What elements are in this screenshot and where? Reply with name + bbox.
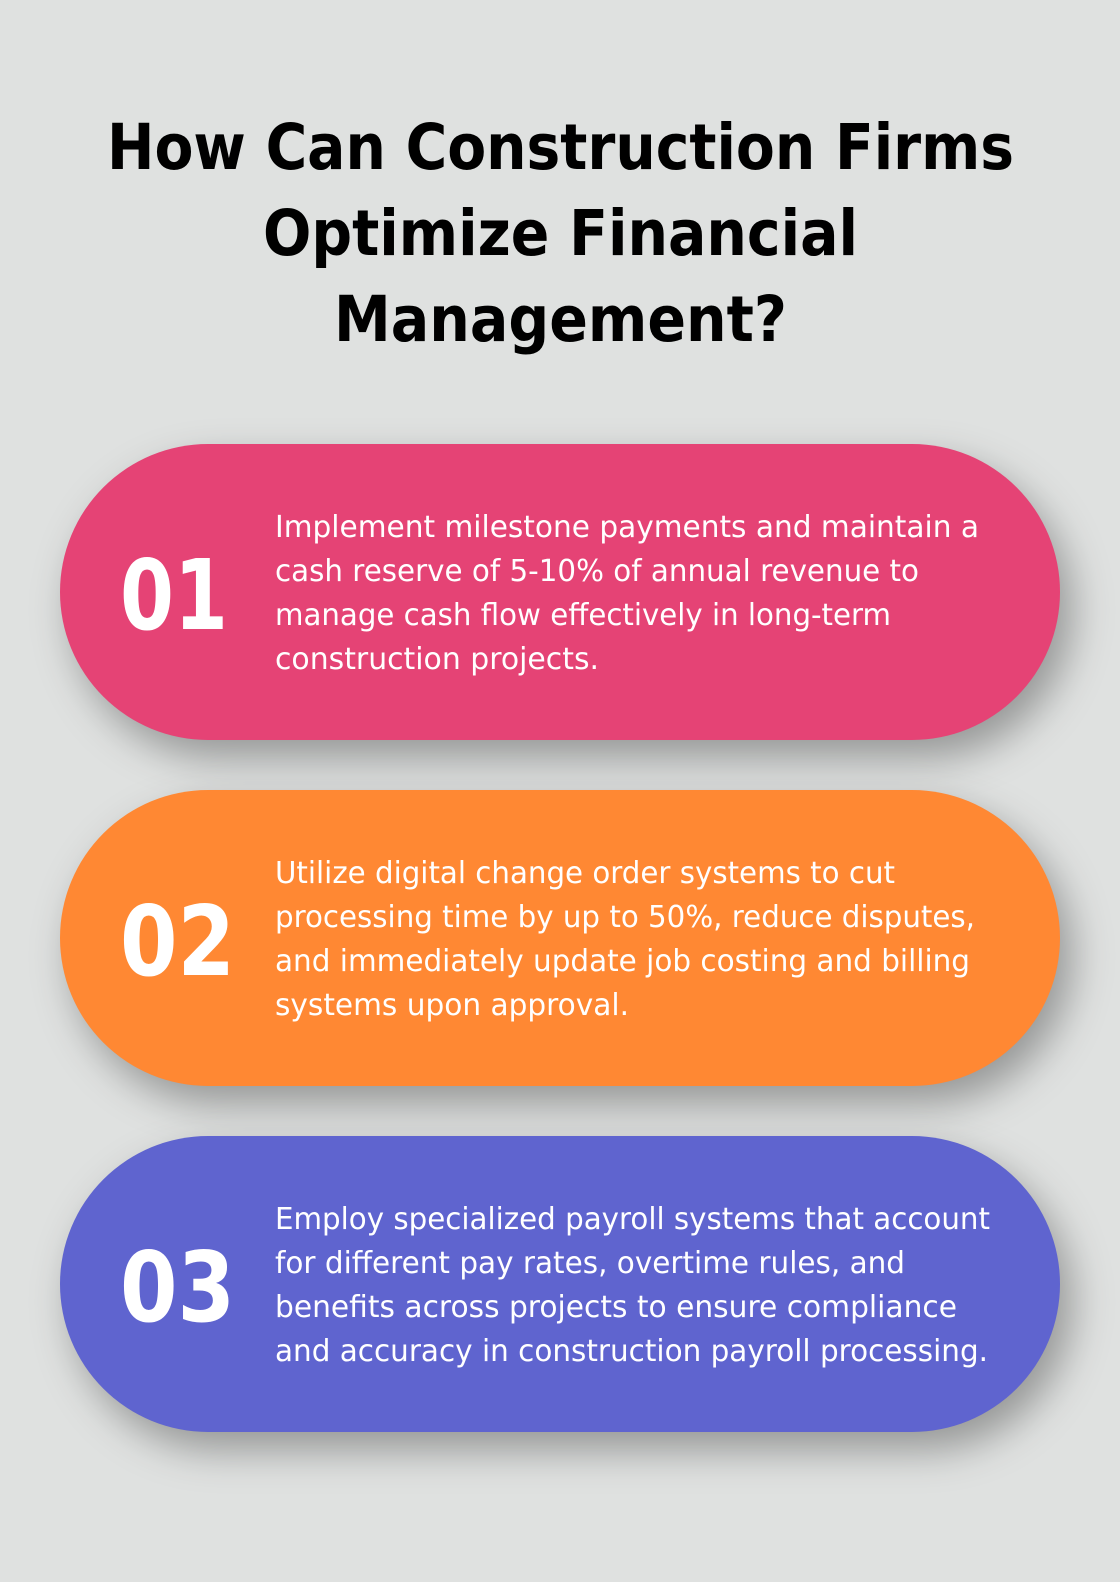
text block: step 02: systems upon approval. — [275, 988, 629, 1023]
text block: step 02: and immediately update job costing and billing — [275, 944, 970, 979]
title: How Can Construction Firms — [107, 111, 1014, 184]
text block: step 01 — [275, 510, 979, 677]
text block: step 01: Implement milestone payments and maintain a — [275, 510, 979, 545]
text block: step 03: Employ specialized payroll systems that account — [275, 1202, 990, 1237]
text block: step 02: Utilize digital change order systems to cut — [275, 856, 895, 891]
number 02: 02 — [120, 885, 235, 998]
text block: step 01: construction projects. — [275, 642, 599, 677]
title: Management? — [334, 283, 787, 356]
text block: step 02 — [275, 856, 975, 1023]
text block: step 02: processing time by up to 50%, reduce disputes, — [275, 900, 975, 935]
text block: step 03: benefits across projects to ensure compliance — [275, 1290, 957, 1325]
title — [107, 111, 1014, 356]
number 03: 03 — [120, 1231, 235, 1344]
title: Optimize Financial — [263, 197, 858, 270]
text block: step 03: and accuracy in construction payroll processing. — [275, 1334, 988, 1369]
text block: step 03: for different pay rates, overtime rules, and — [275, 1246, 905, 1281]
panel: step 01 — [60, 444, 1072, 758]
text block: step 01: cash reserve of 5-10% of annual revenue to — [275, 554, 919, 589]
panel: step 02 — [60, 790, 1072, 1104]
text block: step 03 — [275, 1202, 990, 1369]
text block: step 01: manage cash flow effectively in long-term — [275, 598, 891, 633]
number 01: 01 — [120, 539, 228, 652]
panel: step 03 — [60, 1136, 1072, 1450]
